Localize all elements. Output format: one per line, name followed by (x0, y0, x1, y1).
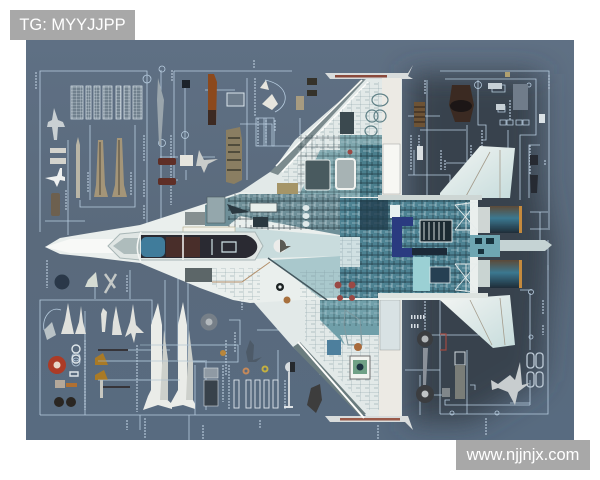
oval outlines (365, 94, 388, 136)
ball joint (285, 362, 295, 372)
forward glass (113, 238, 140, 254)
wing surface (240, 76, 402, 197)
gray panel upper (185, 212, 205, 225)
lower mid systems (272, 256, 340, 298)
watermark: bottom right (456, 440, 590, 470)
tail fin upper (440, 146, 515, 198)
teal column (360, 145, 382, 197)
blue chips (327, 340, 341, 355)
dark lower bay (430, 267, 450, 283)
icon: aircraft top view (47, 108, 65, 140)
tan cell bar (183, 227, 235, 232)
icon: swept jet (45, 168, 65, 187)
white bay top (390, 205, 400, 218)
truss lower (455, 264, 477, 292)
diagonal strut (268, 258, 327, 300)
blue glass (141, 237, 165, 257)
white ovals (302, 205, 310, 227)
dark root wedge (227, 204, 268, 227)
tip rail (325, 65, 413, 79)
table bars (234, 380, 278, 408)
teal structural area (320, 298, 379, 345)
brass coil (414, 102, 425, 127)
upper rail (378, 195, 482, 200)
small fighter (196, 150, 218, 173)
engine rod left (94, 140, 108, 197)
blueprint lines: upper left (40, 66, 360, 235)
thin missile (76, 137, 80, 198)
cockpit dark glass (141, 235, 257, 258)
tail boom (470, 240, 552, 251)
square instrument (350, 356, 370, 379)
wing panel line texture (282, 82, 382, 195)
truss upper (455, 202, 477, 230)
tip rail (325, 416, 413, 430)
brass arm assembly (95, 353, 108, 380)
blueprint illustration (26, 40, 574, 440)
brown glass (166, 237, 200, 257)
aft fuselage teal (340, 198, 470, 298)
wing panel line texture (305, 300, 380, 410)
loops (527, 353, 543, 387)
flap panel (382, 78, 401, 195)
small gauge (417, 146, 423, 160)
blueprint lines: lower right (405, 265, 548, 415)
tail fin lower (440, 295, 515, 348)
hydraulic cluster (307, 384, 322, 413)
wing root detail (250, 203, 277, 212)
red wheel (48, 356, 66, 374)
small box (442, 388, 450, 397)
small schematic (488, 83, 505, 110)
navy C structure (392, 217, 413, 257)
orange equipment (208, 74, 217, 125)
watermark: bottom right: www.njjnjx.com (467, 446, 579, 464)
flap panel (379, 300, 401, 416)
background panel (26, 40, 574, 440)
target ring (276, 283, 284, 291)
upper right parts (414, 72, 545, 193)
white control unit (180, 155, 193, 166)
stacked module (455, 352, 465, 365)
shadow behind rear section (408, 74, 552, 422)
coil springs (411, 317, 426, 326)
white bay left (340, 237, 360, 267)
lower gear (416, 385, 434, 403)
engine nozzle upper (468, 206, 522, 233)
small missiles row (61, 303, 144, 343)
watermark: top left: TG: MYYJJPP (19, 16, 126, 34)
gray panel lower (185, 268, 212, 282)
radial cluster (260, 80, 278, 110)
link ring pair (244, 366, 268, 374)
parts boxes (71, 86, 142, 119)
hatch left (305, 160, 330, 190)
big missile right (168, 302, 195, 409)
tail connectors (530, 155, 538, 193)
forward canopy (108, 232, 263, 260)
linkage rings (70, 345, 80, 376)
big missile left (143, 303, 172, 410)
amber ring (284, 296, 290, 304)
long strut (288, 372, 290, 407)
lower wing (250, 298, 413, 430)
panel stack (204, 368, 218, 378)
dark panel (412, 248, 447, 255)
lower white panel lines (212, 268, 260, 300)
engine nozzle lower (468, 260, 522, 288)
blueprint lines: lower left (40, 270, 320, 440)
upper mid systems (205, 194, 340, 235)
lower right parts (307, 317, 543, 413)
watermark: top left (10, 10, 135, 40)
teal structural area (298, 135, 382, 198)
dark grill (420, 220, 452, 242)
aft mesh texture (340, 198, 470, 298)
cockpit frame (137, 232, 183, 262)
dark cell grid (340, 112, 354, 134)
hatch right (336, 159, 355, 189)
tiny annotation marks (36, 60, 549, 440)
top-right beacon (505, 72, 510, 77)
mid rear teal block (470, 235, 500, 257)
small drone (246, 340, 262, 362)
side connectors (307, 78, 317, 96)
upper wing (240, 65, 413, 198)
dark turbine part (449, 85, 474, 122)
gear strut (100, 380, 103, 398)
dark sensor pod (182, 80, 190, 88)
blueprint lines over missiles (98, 345, 238, 380)
lower left parts (44, 272, 295, 410)
spherical unit (200, 314, 218, 330)
linked diagram (44, 322, 56, 340)
icon: small vehicle (51, 193, 60, 216)
aircraft main illustration (45, 65, 552, 430)
engine rod right (112, 138, 127, 197)
upper gear (417, 331, 433, 347)
icon: small parts (50, 148, 66, 164)
left upper parts grid (45, 74, 317, 216)
cockpit instruments (212, 239, 236, 255)
center tall column (157, 78, 164, 145)
dark control band (360, 200, 388, 230)
gear diagram box (227, 93, 244, 106)
bay wire sketch (344, 310, 362, 345)
orange ring (354, 343, 362, 351)
round dark unit (54, 274, 70, 290)
amber fitting (220, 350, 226, 356)
red fittings (334, 150, 356, 301)
radome nose shading (45, 239, 135, 253)
gray block (207, 197, 225, 223)
landing gear assembly (54, 380, 77, 407)
white clips (85, 272, 98, 287)
light teal bay (413, 257, 430, 291)
dorsal sphere (274, 240, 286, 252)
center fuselage (45, 192, 478, 303)
wing surface (250, 298, 402, 418)
tag chip (539, 114, 545, 123)
dark rods (98, 350, 130, 387)
red connectors (158, 158, 176, 185)
spine (233, 227, 340, 260)
leading edge strip (270, 79, 366, 175)
tan cylinders (277, 183, 298, 198)
white aircraft (491, 362, 530, 405)
tan hull (226, 127, 242, 184)
red clamp (440, 334, 446, 350)
leading edge strip (293, 342, 366, 416)
blueprint lines: upper right (408, 71, 549, 270)
cylinder parts (296, 96, 304, 110)
lower rail (378, 293, 488, 298)
